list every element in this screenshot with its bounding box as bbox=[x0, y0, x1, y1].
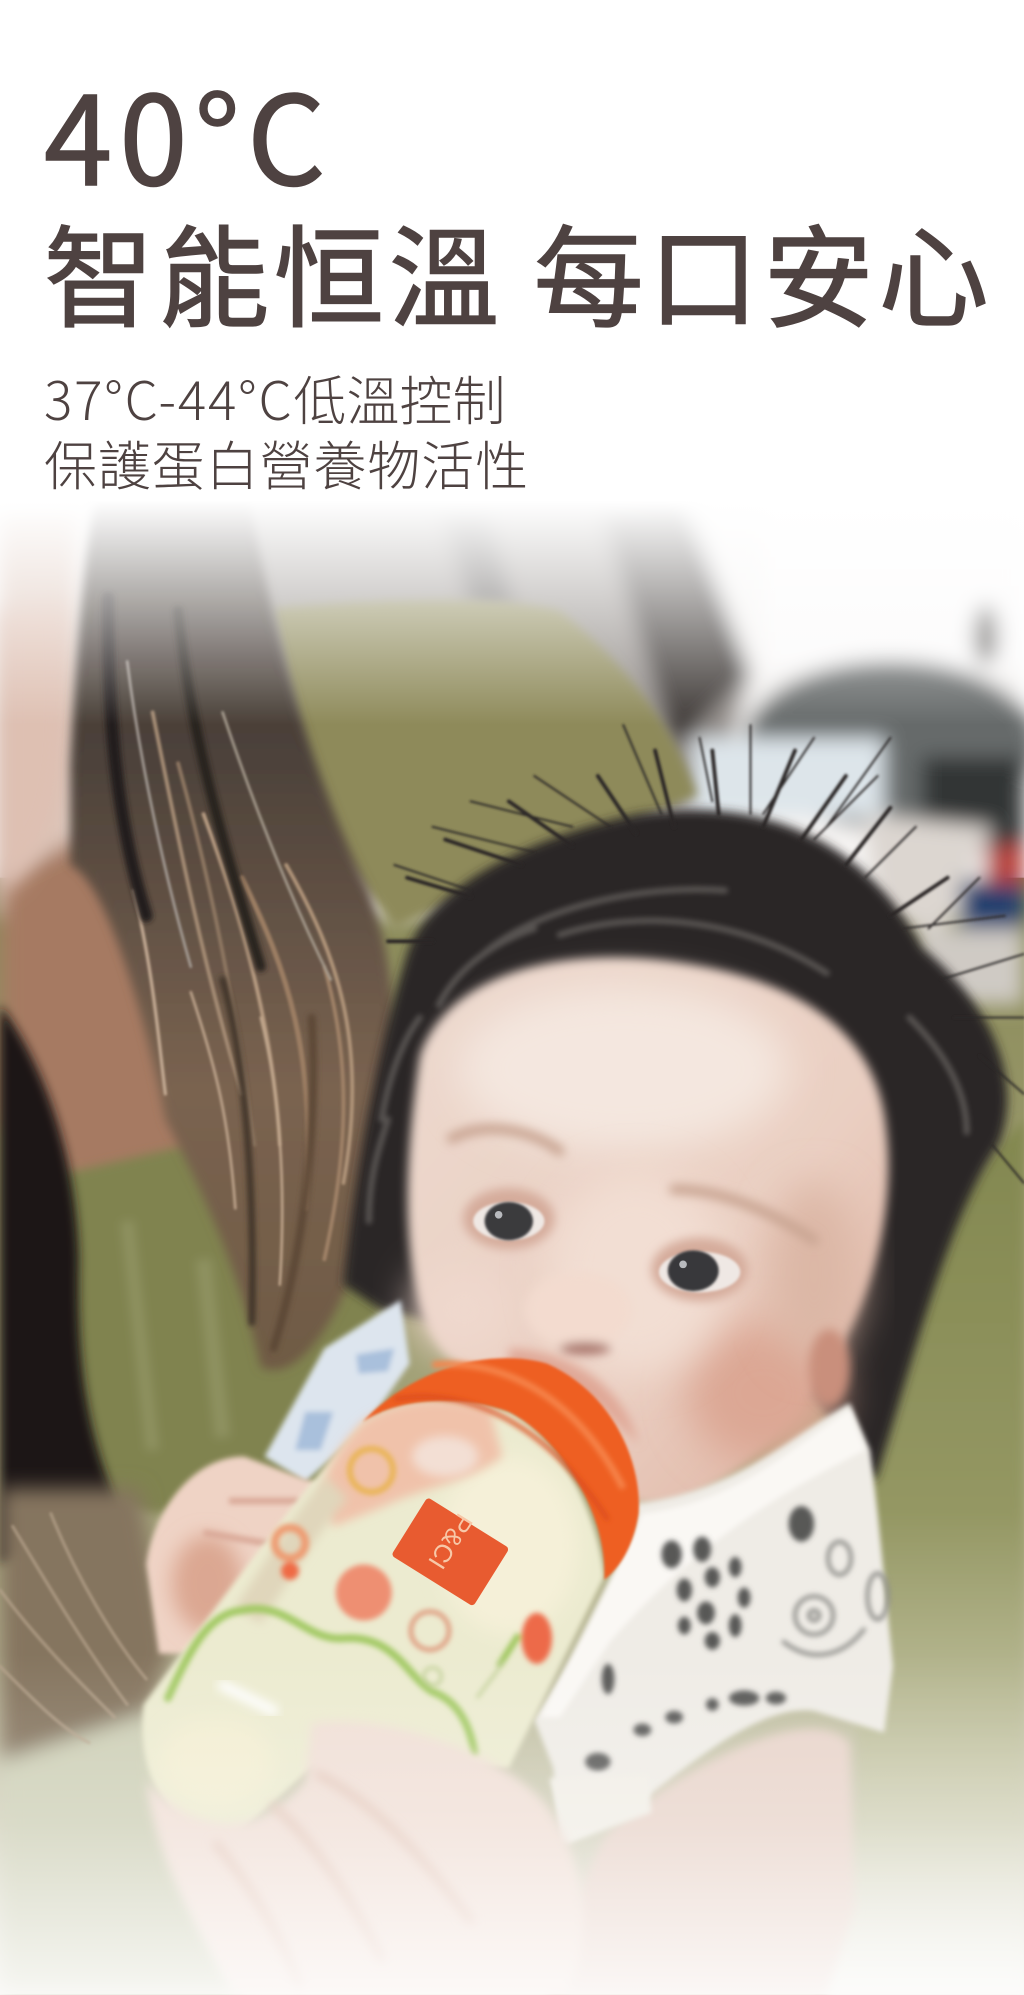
baby's upper hand gripping the bottle bbox=[146, 1456, 341, 1654]
eyebrows bbox=[452, 1129, 814, 1240]
swirl decoration bbox=[350, 1449, 393, 1492]
lower left hair and sleeve bbox=[0, 1488, 242, 1994]
subtitle line 1: 37°C-44°C低溫控制 bbox=[44, 360, 506, 436]
photo underlay of lower body tones bbox=[0, 878, 1024, 1994]
fade to white at the bottom of the photo bbox=[0, 1654, 1024, 1994]
bottle logo: P&CI bbox=[422, 1509, 478, 1574]
mother's long hair bbox=[70, 432, 394, 1370]
baby's lower hand bbox=[146, 1721, 583, 1994]
subtitle line 2: 保護蛋白營養物活性 bbox=[44, 425, 529, 501]
photo background: room behind mother and baby bbox=[0, 382, 1024, 1005]
nose bbox=[525, 1272, 632, 1355]
mother's olive shoulder bbox=[273, 600, 697, 929]
baby's white patterned bib bbox=[534, 1403, 893, 1844]
fade to white at the top of the photo bbox=[0, 0, 1024, 725]
title: smart constant temperature: 智能恒溫 每口安心 bbox=[44, 190, 994, 350]
eye left bbox=[463, 1188, 555, 1249]
flower decorations bbox=[275, 1528, 552, 1698]
baby's forearm bbox=[547, 1729, 855, 1994]
bottle highlight bbox=[223, 1685, 273, 1711]
bottle body bbox=[142, 1401, 604, 1842]
white sleeve cuff bbox=[550, 1774, 651, 1844]
mouth shadow above the bottle bbox=[509, 1348, 639, 1444]
green wave decoration bbox=[168, 1609, 474, 1753]
bottle logo bbox=[391, 1493, 512, 1607]
title: temperature: 40°C bbox=[44, 43, 333, 221]
baby bottle bbox=[142, 1358, 639, 1842]
baby's face bbox=[408, 958, 888, 1505]
baby's blue and white collar bbox=[265, 1300, 410, 1482]
mother's chin bbox=[0, 598, 68, 894]
baby's hair bbox=[343, 725, 1024, 1482]
mother's dark hair at left edge bbox=[0, 1005, 121, 1565]
eye right bbox=[651, 1238, 748, 1301]
ear bbox=[809, 1329, 850, 1406]
mother's olive right arm bbox=[814, 1119, 1024, 1994]
bottle cap bbox=[363, 1358, 639, 1580]
mother's olive shirt bbox=[51, 1138, 382, 1514]
mother's neck and chest skin bbox=[0, 509, 216, 1189]
